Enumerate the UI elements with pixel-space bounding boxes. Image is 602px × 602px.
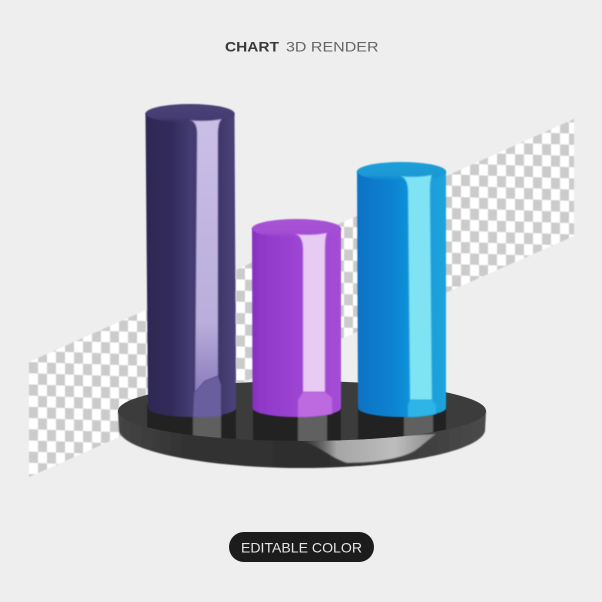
platform base [118, 381, 486, 468]
lower highlight [298, 392, 332, 417]
transparency checkerboard band [29, 119, 574, 477]
title [225, 40, 379, 54]
cylinder top [357, 162, 446, 181]
cylinder reflections on platform [147, 405, 446, 445]
platform side shine [298, 434, 436, 463]
cylinder body [252, 228, 341, 417]
button: editable color [229, 532, 374, 562]
highlight [400, 175, 432, 400]
title: 3D RENDER [286, 40, 379, 54]
cylinder top [146, 104, 234, 123]
lower highlight [408, 400, 436, 417]
highlight [295, 233, 327, 392]
platform top surface [118, 381, 486, 441]
platform side [118, 411, 486, 468]
bar: purple cylinder [252, 219, 341, 417]
bar: dark indigo cylinder [146, 104, 236, 417]
cylinder top [252, 219, 341, 238]
lower highlight [193, 376, 221, 417]
cylinder body [146, 113, 236, 417]
bar: blue cylinder [357, 162, 446, 417]
highlight [189, 119, 222, 392]
cylinder body [357, 171, 446, 417]
button: editable color: EDITABLE COLOR [241, 540, 362, 556]
title: CHART [225, 40, 280, 54]
